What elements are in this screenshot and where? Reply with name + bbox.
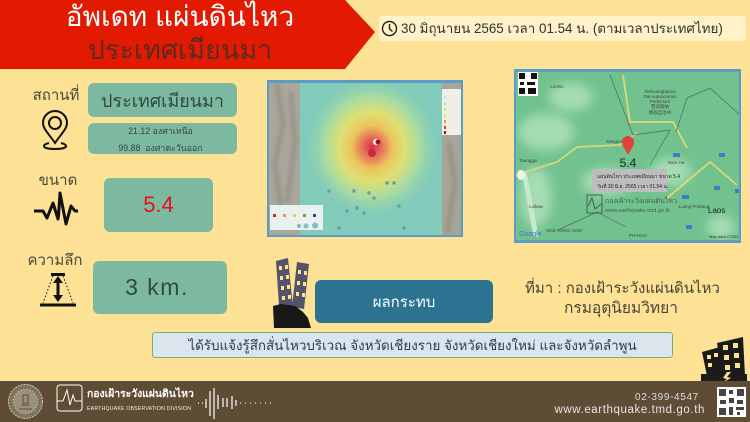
title line 1: อัพเดท แผ่นดินไหว	[66, 1, 294, 32]
map place labels: Prefecture	[650, 99, 671, 104]
map place labels: 西双版纳	[651, 103, 669, 110]
icon: collapsing buildings	[273, 258, 311, 328]
depth and magnitude legend	[270, 205, 323, 230]
impact heading box	[315, 280, 493, 323]
coordinates box	[88, 123, 237, 154]
QR code	[518, 72, 538, 96]
map caption: วันที่ 30 มิ.ย. 2565 เวลา 01.54 น.	[597, 183, 668, 190]
map: location map	[514, 69, 741, 243]
department seal	[8, 384, 43, 419]
map place labels: Luang Prabang	[679, 204, 710, 209]
location name box	[88, 83, 237, 117]
map place labels: Dai Autonomous	[643, 94, 677, 99]
footer	[0, 381, 750, 422]
division english: EARTHQUAKE OBSERVATION DIVISION	[87, 406, 191, 412]
depth value box: 3 km.	[125, 274, 189, 300]
division logo	[56, 384, 194, 412]
map watermark logo: www.earthquake.tmd.go.th	[604, 208, 670, 214]
map place labels: Xishuangbanna	[644, 89, 676, 94]
road badges	[673, 153, 739, 229]
QR code	[717, 387, 746, 417]
map place labels: Kengtung	[606, 139, 626, 144]
date text: 30 มิถุนายน 2565 เวลา 01.54 น. (ตามเวลาประเทศไทย)	[401, 21, 723, 36]
impact heading box: ผลกระทบ	[373, 294, 435, 310]
map: location map: Laos	[708, 206, 725, 215]
map caption	[592, 169, 680, 192]
map: location map: 5.4	[620, 156, 637, 170]
map: location map: Google	[519, 231, 542, 238]
map place labels: Nam Ha	[668, 160, 685, 165]
source text: ที่มา : กองเฝ้าระวังแผ่นดินไหว	[525, 280, 720, 297]
division name: กองเฝ้าระวังแผ่นดินไหว	[87, 389, 194, 400]
map place labels: Taunggyi	[519, 158, 537, 163]
magnitude value box	[104, 178, 213, 232]
icon: clock	[382, 20, 398, 36]
depth label: ความลึก	[27, 252, 83, 269]
coordinates box: 21.12 องศาเหนือ	[128, 126, 193, 136]
impact description: ได้รับแจ้งรู้สึกสั่นไหวบริเวณ จังหวัดเชียงราย จังหวัดเชียงใหม่ และจังหวัดลำพูน	[188, 338, 637, 352]
phone number: 02-399-4547	[635, 392, 699, 403]
map place labels	[519, 84, 710, 238]
location label: สถานที่	[33, 87, 79, 104]
intensity legend	[442, 89, 461, 135]
map watermark logo	[587, 195, 677, 214]
map place labels: Lashio	[550, 84, 564, 89]
map watermark logo: กองเฝ้าระวังแผ่นดินไหว	[605, 196, 677, 205]
map place labels: Loikaw	[529, 204, 544, 209]
title banner	[0, 0, 375, 69]
magnitude label: ขนาด	[39, 172, 77, 189]
map place labels: 傣族自治州	[649, 109, 672, 116]
title line 2: ประเทศเมียนมา	[88, 35, 272, 65]
map: intensity map	[267, 80, 463, 237]
icon: location pin	[42, 110, 68, 150]
impact description	[152, 332, 673, 358]
map: location map: Map data ©2022	[709, 234, 739, 239]
source text: กรมอุตุนิยมวิทยา	[564, 300, 678, 317]
website: www.earthquake.tmd.go.th	[554, 404, 705, 416]
depth value box	[93, 261, 227, 314]
pin	[622, 136, 634, 155]
source text	[525, 278, 720, 318]
map place labels: MAE HONG SON	[546, 228, 582, 233]
map place labels: PHAYAO	[629, 233, 648, 238]
magnitude value box: 5.4	[143, 192, 174, 217]
sound wave decoration	[198, 388, 271, 419]
date and time bar	[379, 16, 746, 41]
icon: depth	[40, 273, 76, 306]
icon: seismic wave	[34, 192, 78, 226]
icon: cracked building	[701, 337, 747, 381]
map caption: แผ่นดินไหว ประเทศเมียนมา ขนาด 5.4	[597, 173, 680, 180]
coordinates box: 99.88 องศาตะวันออก	[118, 143, 203, 153]
location name box: ประเทศเมียนมา	[101, 90, 224, 110]
